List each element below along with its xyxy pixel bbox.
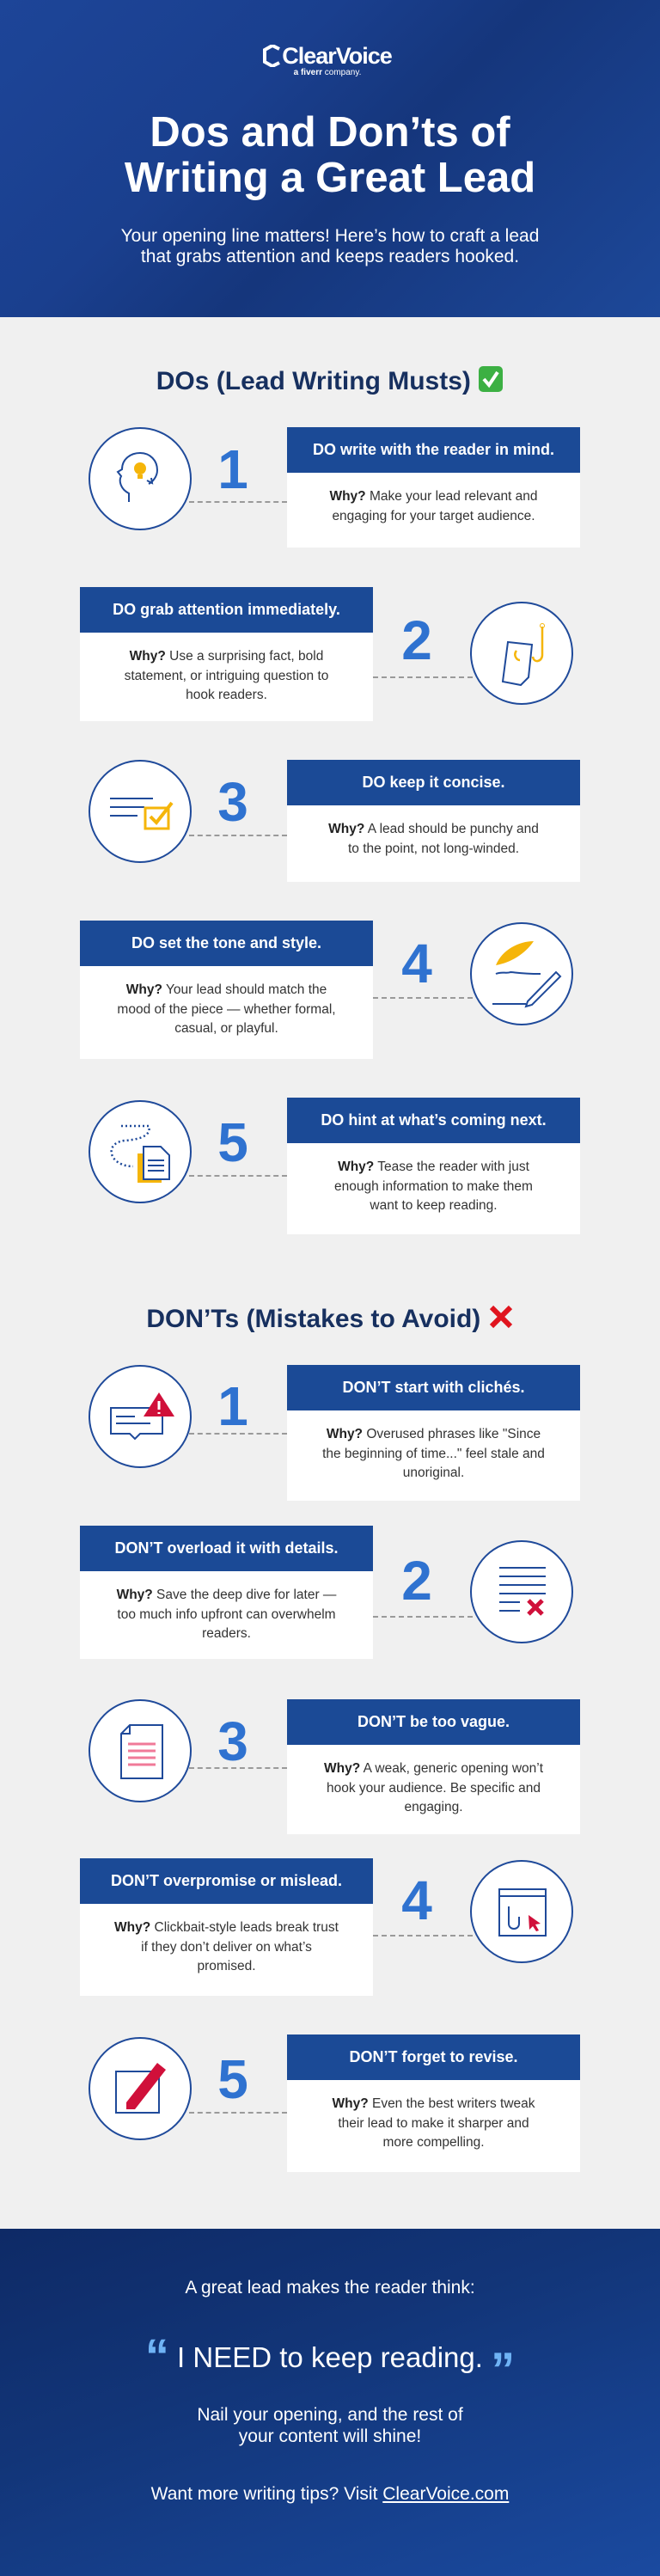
icon: quill and pen [470, 922, 573, 1025]
card: Why? Clickbait-style leads break trust if they don’t deliver on what’s promised. [114, 1920, 339, 1973]
icon: text lines with x [470, 1540, 573, 1643]
icon: lines and checkbox [89, 760, 192, 863]
number 1: 1 [217, 1375, 248, 1437]
card: Why? Save the deep dive for later — too much info upfront can overwhelm readers. [117, 1588, 336, 1641]
DO 2 [80, 587, 573, 721]
card [287, 1365, 580, 1501]
card [287, 1098, 580, 1234]
title: Dos and Don’ts of [150, 109, 510, 156]
card: Why? Overused phrases like "Since the beginning of time..." feel stale and unoriginal. [322, 1427, 545, 1480]
header banner [0, 0, 660, 317]
card: DON’T be too vague. [358, 1713, 510, 1730]
card: DO hint at what’s coming next. [321, 1111, 547, 1129]
card [287, 760, 580, 882]
card: Why? Your lead should match the mood of the piece — whether formal, casual, or playful. [117, 982, 336, 1036]
card: Why? A weak, generic opening won’t hook your audience. Be specific and engaging. [324, 1761, 543, 1814]
card [287, 2034, 580, 2172]
icon: browser with hook and cursor [470, 1860, 573, 1963]
subtitle: Your opening line matters! Here’s how to craft a lead [121, 226, 539, 246]
number 5: 5 [217, 2048, 248, 2110]
card: Why? Make your lead relevant and engaging for your target audience. [329, 489, 538, 523]
card: Why? Use a surprising fact, bold statement, or intriguing question to hook readers. [125, 649, 328, 702]
card [80, 587, 373, 721]
DON'T 1 [89, 1365, 580, 1501]
footer lead-in: A great lead makes the reader think: [185, 2278, 475, 2298]
DO 1 [89, 427, 580, 548]
DO 3 [89, 760, 580, 882]
DON'T 4 [80, 1858, 573, 1996]
card: DO grab attention immediately. [113, 601, 340, 618]
number 4: 4 [401, 933, 432, 994]
DON'T 3 [89, 1699, 580, 1834]
number 5: 5 [217, 1111, 248, 1173]
closing text: your content will shine! [239, 2426, 421, 2446]
card: Why? Even the best writers tweak their lead to make it sharper and more compelling. [332, 2096, 535, 2150]
card: Why? A lead should be punchy and to the point, not long-winded. [328, 822, 539, 856]
icon: quote bubble with warning [89, 1365, 192, 1468]
icon: edit pencil [89, 2037, 192, 2140]
card: Why? Tease the reader with just enough information to make them want to keep reading. [334, 1160, 533, 1213]
logo [263, 43, 392, 77]
number 3: 3 [217, 1710, 248, 1772]
number 1: 1 [217, 438, 248, 500]
closing text [197, 2405, 463, 2446]
DON'T 2 [80, 1526, 573, 1659]
number 3: 3 [217, 771, 248, 833]
subtitle: that grabs attention and keeps readers hooked. [141, 247, 519, 266]
card: DO keep it concise. [362, 774, 505, 791]
number 2: 2 [401, 1550, 432, 1612]
DON'T 5 [89, 2034, 580, 2172]
card [287, 427, 580, 548]
card: DO write with the reader in mind. [313, 441, 554, 458]
icon: head with lightbulb [89, 427, 192, 530]
card: DON’T forget to revise. [349, 2048, 518, 2065]
closing text: Nail your opening, and the rest of [197, 2405, 463, 2425]
logo: a fiverr company. [294, 68, 361, 77]
title [124, 109, 535, 201]
card: DO set the tone and style. [131, 934, 321, 951]
card [80, 921, 373, 1059]
card: DON’T overload it with details. [114, 1539, 339, 1557]
icon: dotted path to document [89, 1100, 192, 1203]
icon: document [89, 1699, 192, 1802]
card: DON’T start with clichés. [342, 1379, 525, 1396]
quote: “ I NEED to keep reading. ” [145, 2328, 515, 2396]
DO 4 [80, 921, 573, 1059]
card [80, 1858, 373, 1996]
card [287, 1699, 580, 1834]
card: DON’T overpromise or mislead. [111, 1872, 342, 1889]
call to action: Want more writing tips? Visit ClearVoice.com [151, 2484, 509, 2504]
DO 5 [89, 1098, 580, 1234]
section heading: DOs: DOs (Lead Writing Musts) [156, 367, 471, 395]
number 4: 4 [401, 1869, 432, 1931]
card [80, 1526, 373, 1659]
footer banner [0, 2229, 660, 2576]
subtitle [121, 226, 539, 266]
number 2: 2 [401, 609, 432, 671]
section heading: DON'Ts: DON’Ts (Mistakes to Avoid) [146, 1305, 480, 1333]
icon: hook and paper [470, 602, 573, 705]
title: Writing a Great Lead [125, 155, 535, 201]
logo: ClearVoice [282, 43, 392, 69]
